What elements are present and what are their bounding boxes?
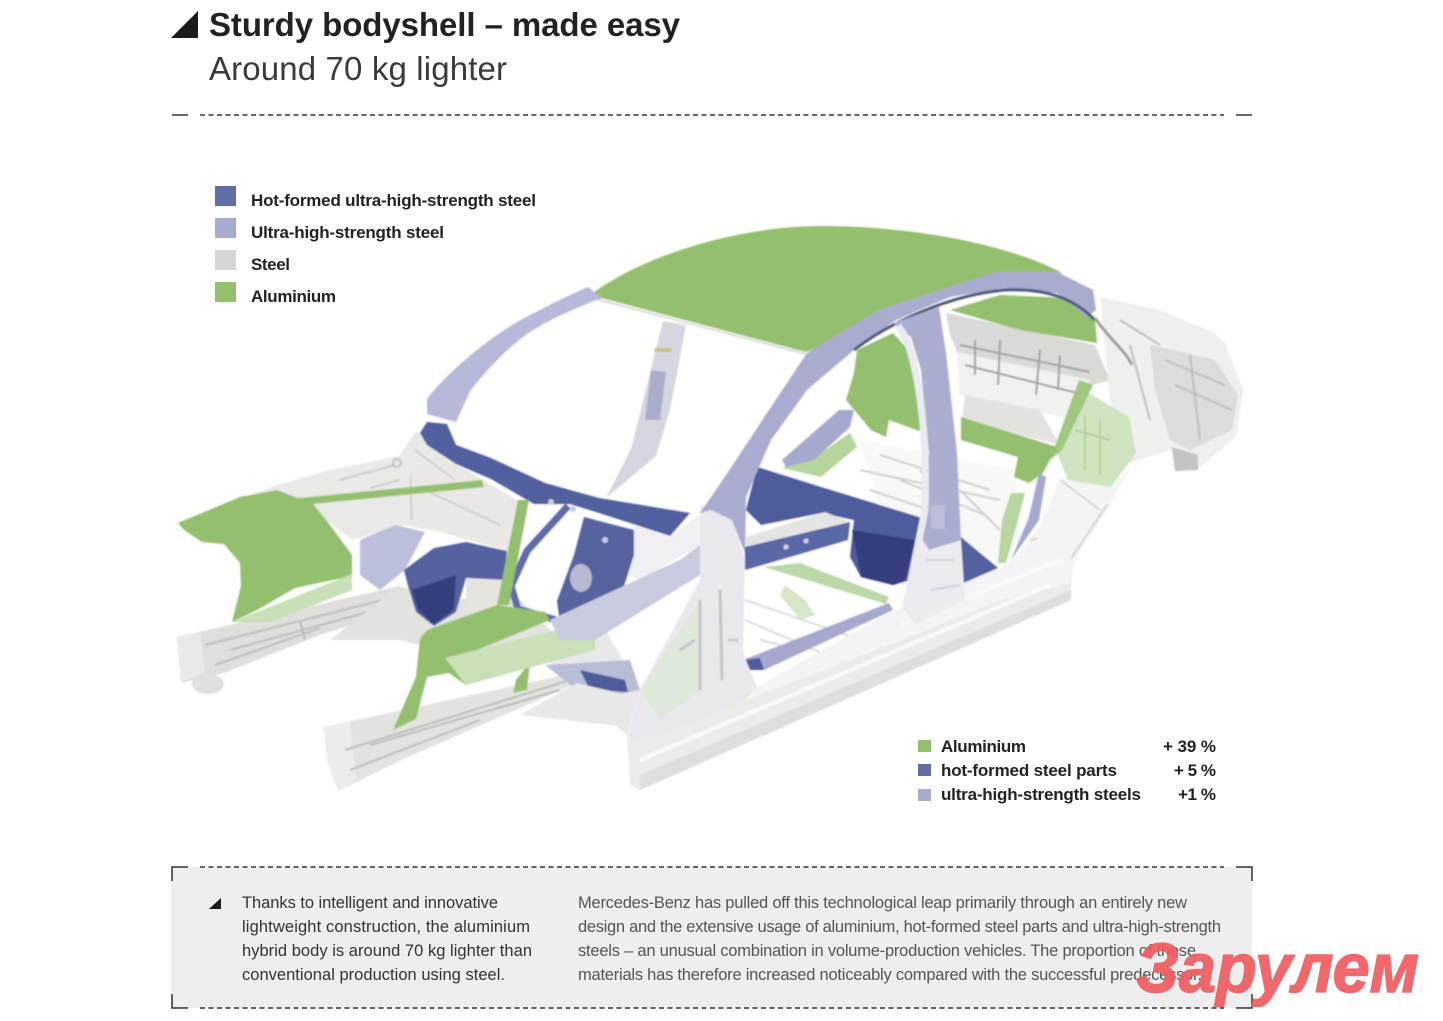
row: ultra-high-strength steels: ultra-high-strength steels <box>941 785 1141 804</box>
left front rail (steel) <box>177 586 402 694</box>
rear floor aluminium <box>961 417 1057 483</box>
right lower body (steel and light blue) <box>520 620 640 735</box>
rear floor and back structure (steel) <box>860 313 1110 565</box>
legend item: steel <box>215 250 290 274</box>
dark blue cowl cross member <box>420 422 690 536</box>
legend item: aluminium <box>215 282 336 306</box>
left aluminium strut tower <box>178 490 352 622</box>
roof aluminium panel <box>590 226 1062 352</box>
floor aluminium near sill <box>998 493 1025 563</box>
text block: summary: Thanks to intelligent and innovative <box>242 894 498 912</box>
comparison legend with percentages <box>918 737 1216 804</box>
rear end section (steel) <box>1100 297 1243 471</box>
inner pillar behind windshield <box>606 321 686 498</box>
light-green left rail strip <box>232 574 352 622</box>
front firewall (steel) <box>402 431 527 551</box>
rear arc extension <box>1095 318 1132 365</box>
central cross beam <box>745 512 850 570</box>
inner floor lines <box>745 600 890 665</box>
row: aluminium <box>918 737 1216 756</box>
row: aluminium: Aluminium <box>941 737 1026 756</box>
row: ultra-high-strength steels: +1 % <box>1178 785 1216 804</box>
legend item: aluminium: Aluminium <box>251 287 336 306</box>
dark blue transmission tunnel cross member <box>746 467 998 585</box>
row: hot-formed steel parts: + 5 % <box>1174 761 1216 780</box>
aluminium vertical strut <box>497 500 529 605</box>
dark inner line of door arc <box>854 290 1095 350</box>
sill (steel) <box>627 520 1071 790</box>
row: ultra-high-strength steels <box>918 785 1216 804</box>
row: hot-formed steel parts: hot-formed steel parts <box>941 761 1117 780</box>
front roof pillar (ultra-high-strength) <box>427 287 602 422</box>
row: aluminium: + 39 % <box>1163 737 1216 756</box>
aluminium strut rod <box>259 480 484 504</box>
text block: detail: steels – an unusual combination in volume-production vehicles. The proportion of these <box>578 942 1196 960</box>
subheading: Around 70 kg lighter <box>209 50 507 87</box>
aluminium right strut base <box>393 605 550 730</box>
text block: summary: lightweight construction, the aluminium <box>242 918 530 936</box>
light green brace <box>782 433 857 477</box>
light blue fender beam <box>550 545 700 640</box>
text block: summary: conventional production using steel. <box>242 966 505 984</box>
B-pillar light edge <box>898 326 925 610</box>
text block: detail: design and the extensive usage of aluminium, hot-formed steel parts and ultra-high-strength <box>578 918 1221 936</box>
roof edge <box>592 298 806 354</box>
front steel mid section <box>330 586 560 660</box>
rear quarter and wheel arch (steel) <box>940 467 1132 600</box>
aluminium lower leg <box>513 662 530 693</box>
text block: detail: materials has therefore increased noticeably compared with the successful predecessor. <box>578 966 1202 984</box>
legend: materials <box>215 186 536 306</box>
rear light-green quarter panel <box>1057 393 1136 487</box>
text block: detail: Mercedes-Benz has pulled off this technological leap primarily through an entirely new <box>578 894 1187 912</box>
blue suspension tower <box>557 517 634 616</box>
text block: summary <box>242 894 532 984</box>
right front rail (steel) <box>324 673 577 791</box>
panel: summary box <box>171 867 1252 1008</box>
parcel shelf aluminium <box>950 295 1097 343</box>
watermark logo: Зарулем <box>1136 929 1419 1007</box>
row: hot-formed steel parts <box>918 761 1216 780</box>
light green front beam <box>445 620 595 685</box>
inner apron (ultra-high-strength) <box>360 525 425 590</box>
legend item: hot-formed steel: Hot-formed ultra-high-strength steel <box>251 191 536 210</box>
steel behind tower <box>628 515 700 580</box>
icon: title triangle <box>171 11 198 38</box>
car bodyshell illustration <box>177 226 1243 791</box>
blue strut brace <box>511 506 568 620</box>
rear door arc (ultra-high-strength) <box>700 272 1096 553</box>
icon: bullet triangle <box>209 898 221 909</box>
rear green strip <box>1050 380 1093 460</box>
rear blue wedge <box>1011 473 1046 560</box>
front upper apron (steel) <box>177 431 416 540</box>
heading: Sturdy bodyshell – made easy <box>209 6 681 43</box>
title block <box>171 6 681 87</box>
floor stripes (light aluminium) <box>764 563 889 620</box>
blue bracket mid door <box>782 410 854 467</box>
legend item: steel: Steel <box>251 255 290 274</box>
rear wall aluminium <box>846 333 925 437</box>
text block: detail <box>578 894 1221 984</box>
dark blue wheel arch <box>404 542 510 626</box>
text block: summary: hybrid body is around 70 kg lighter than <box>242 942 532 960</box>
lower B-pillar <box>905 537 965 625</box>
B-pillar <box>893 307 961 550</box>
A-pillar base (steel, light blue tint) <box>627 505 757 738</box>
legend item: ultra-high-strength steel: Ultra-high-strength steel <box>251 223 444 242</box>
legend item: ultra-high-strength steel <box>215 218 444 242</box>
blue floor rail <box>743 603 893 670</box>
